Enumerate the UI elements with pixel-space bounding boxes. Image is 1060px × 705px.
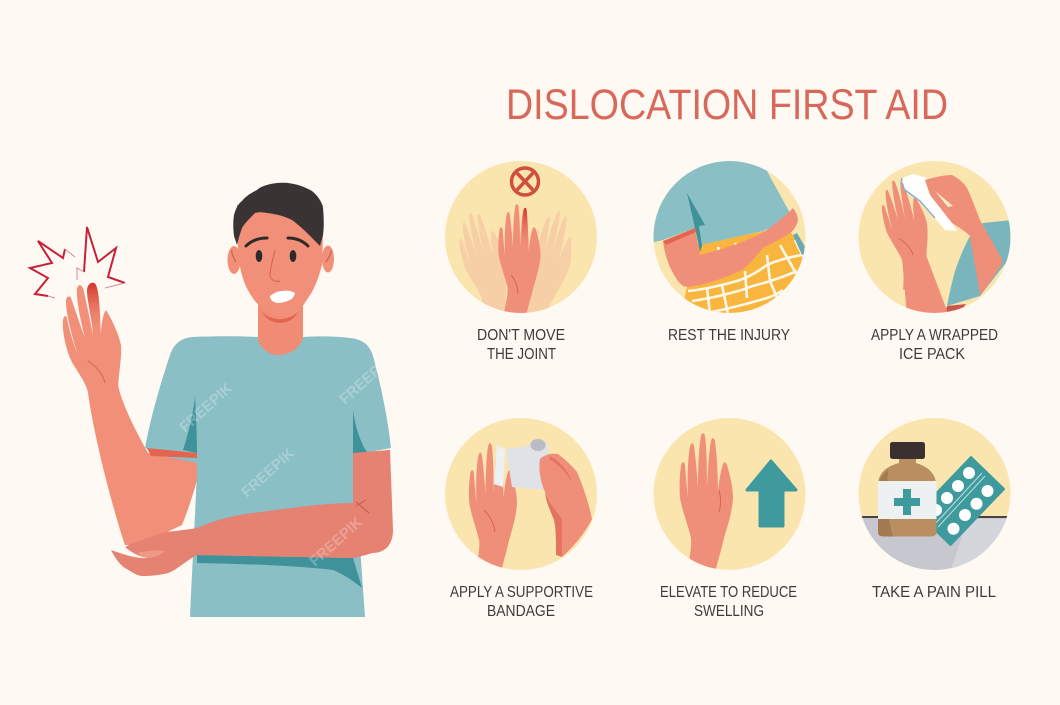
label: SWELLING — [694, 603, 764, 620]
injured finger — [522, 208, 528, 238]
blister pack — [936, 456, 1005, 546]
circle — [654, 161, 806, 313]
centre hand — [498, 204, 541, 320]
circle — [654, 418, 806, 570]
shirt — [654, 161, 790, 245]
watermarks: FREEPIK — [238, 445, 298, 501]
checked blanket — [684, 231, 804, 313]
bandage — [506, 440, 553, 490]
panel: apply a wrapped ice pack — [858, 161, 1012, 363]
fold of cloth in hand — [935, 191, 953, 207]
watermarks: FREEPIK — [176, 380, 236, 436]
head — [228, 183, 334, 323]
circle — [858, 418, 1010, 570]
label: BANDAGE — [487, 603, 555, 620]
palm crease — [511, 275, 518, 294]
pain burst — [30, 227, 125, 298]
circle — [858, 161, 1010, 313]
palm highlight — [138, 550, 165, 558]
circle — [445, 418, 597, 570]
table — [862, 516, 1008, 570]
label: APPLY A WRAPPED — [871, 327, 998, 344]
left hand and forearm — [882, 180, 948, 313]
bandage roll — [530, 439, 546, 451]
neck — [258, 305, 303, 355]
watermarks: FREEPIK — [306, 514, 366, 570]
teal edge — [793, 233, 805, 255]
left hand — [469, 443, 517, 580]
arm — [663, 208, 798, 287]
character: man with injured finger — [30, 183, 396, 617]
hand shading — [545, 456, 572, 557]
wrapped finger — [494, 445, 505, 487]
sleeve shadows — [147, 448, 390, 461]
icon: up arrow — [747, 461, 796, 526]
elbow crease — [356, 500, 369, 513]
right hand and arm — [925, 175, 1003, 295]
shirt fold — [687, 193, 705, 252]
label — [660, 584, 797, 620]
pale motion hands — [460, 211, 572, 313]
label: APPLY A SUPPORTIVE — [450, 584, 593, 601]
watermarks: FREEPIK — [336, 352, 396, 408]
watermarks — [176, 352, 396, 570]
raised hand — [63, 283, 121, 392]
panel: take a pain pill — [855, 418, 1015, 601]
title: DISLOCATION FIRST AID — [506, 81, 948, 129]
label: DON'T MOVE — [477, 327, 565, 344]
folded arm — [111, 450, 393, 576]
circle — [445, 161, 597, 313]
label: TAKE A PAIN PILL — [872, 584, 996, 601]
label: ELEVATE TO REDUCE — [660, 584, 797, 601]
label — [871, 327, 998, 363]
panel: elevate to reduce swelling — [654, 418, 806, 620]
label — [450, 584, 593, 620]
label: REST THE INJURY — [668, 327, 790, 344]
raised arm — [87, 385, 197, 545]
panel: apply a supportive bandage — [445, 418, 597, 620]
white cloth — [902, 174, 957, 231]
t-shirt — [145, 336, 391, 617]
sleeve bottom shadow — [946, 304, 966, 312]
teal sleeve — [947, 220, 1012, 306]
label: THE JOINT — [487, 346, 556, 363]
sleeve shadow on arm — [663, 228, 696, 245]
label — [477, 327, 565, 363]
panel: don't move the joint — [445, 161, 597, 363]
panel: rest the injury — [654, 161, 806, 340]
hand — [680, 433, 733, 580]
icon: do not — [512, 168, 538, 195]
label: ICE PACK — [899, 346, 965, 363]
right hand — [539, 454, 592, 557]
bottle — [878, 442, 936, 536]
